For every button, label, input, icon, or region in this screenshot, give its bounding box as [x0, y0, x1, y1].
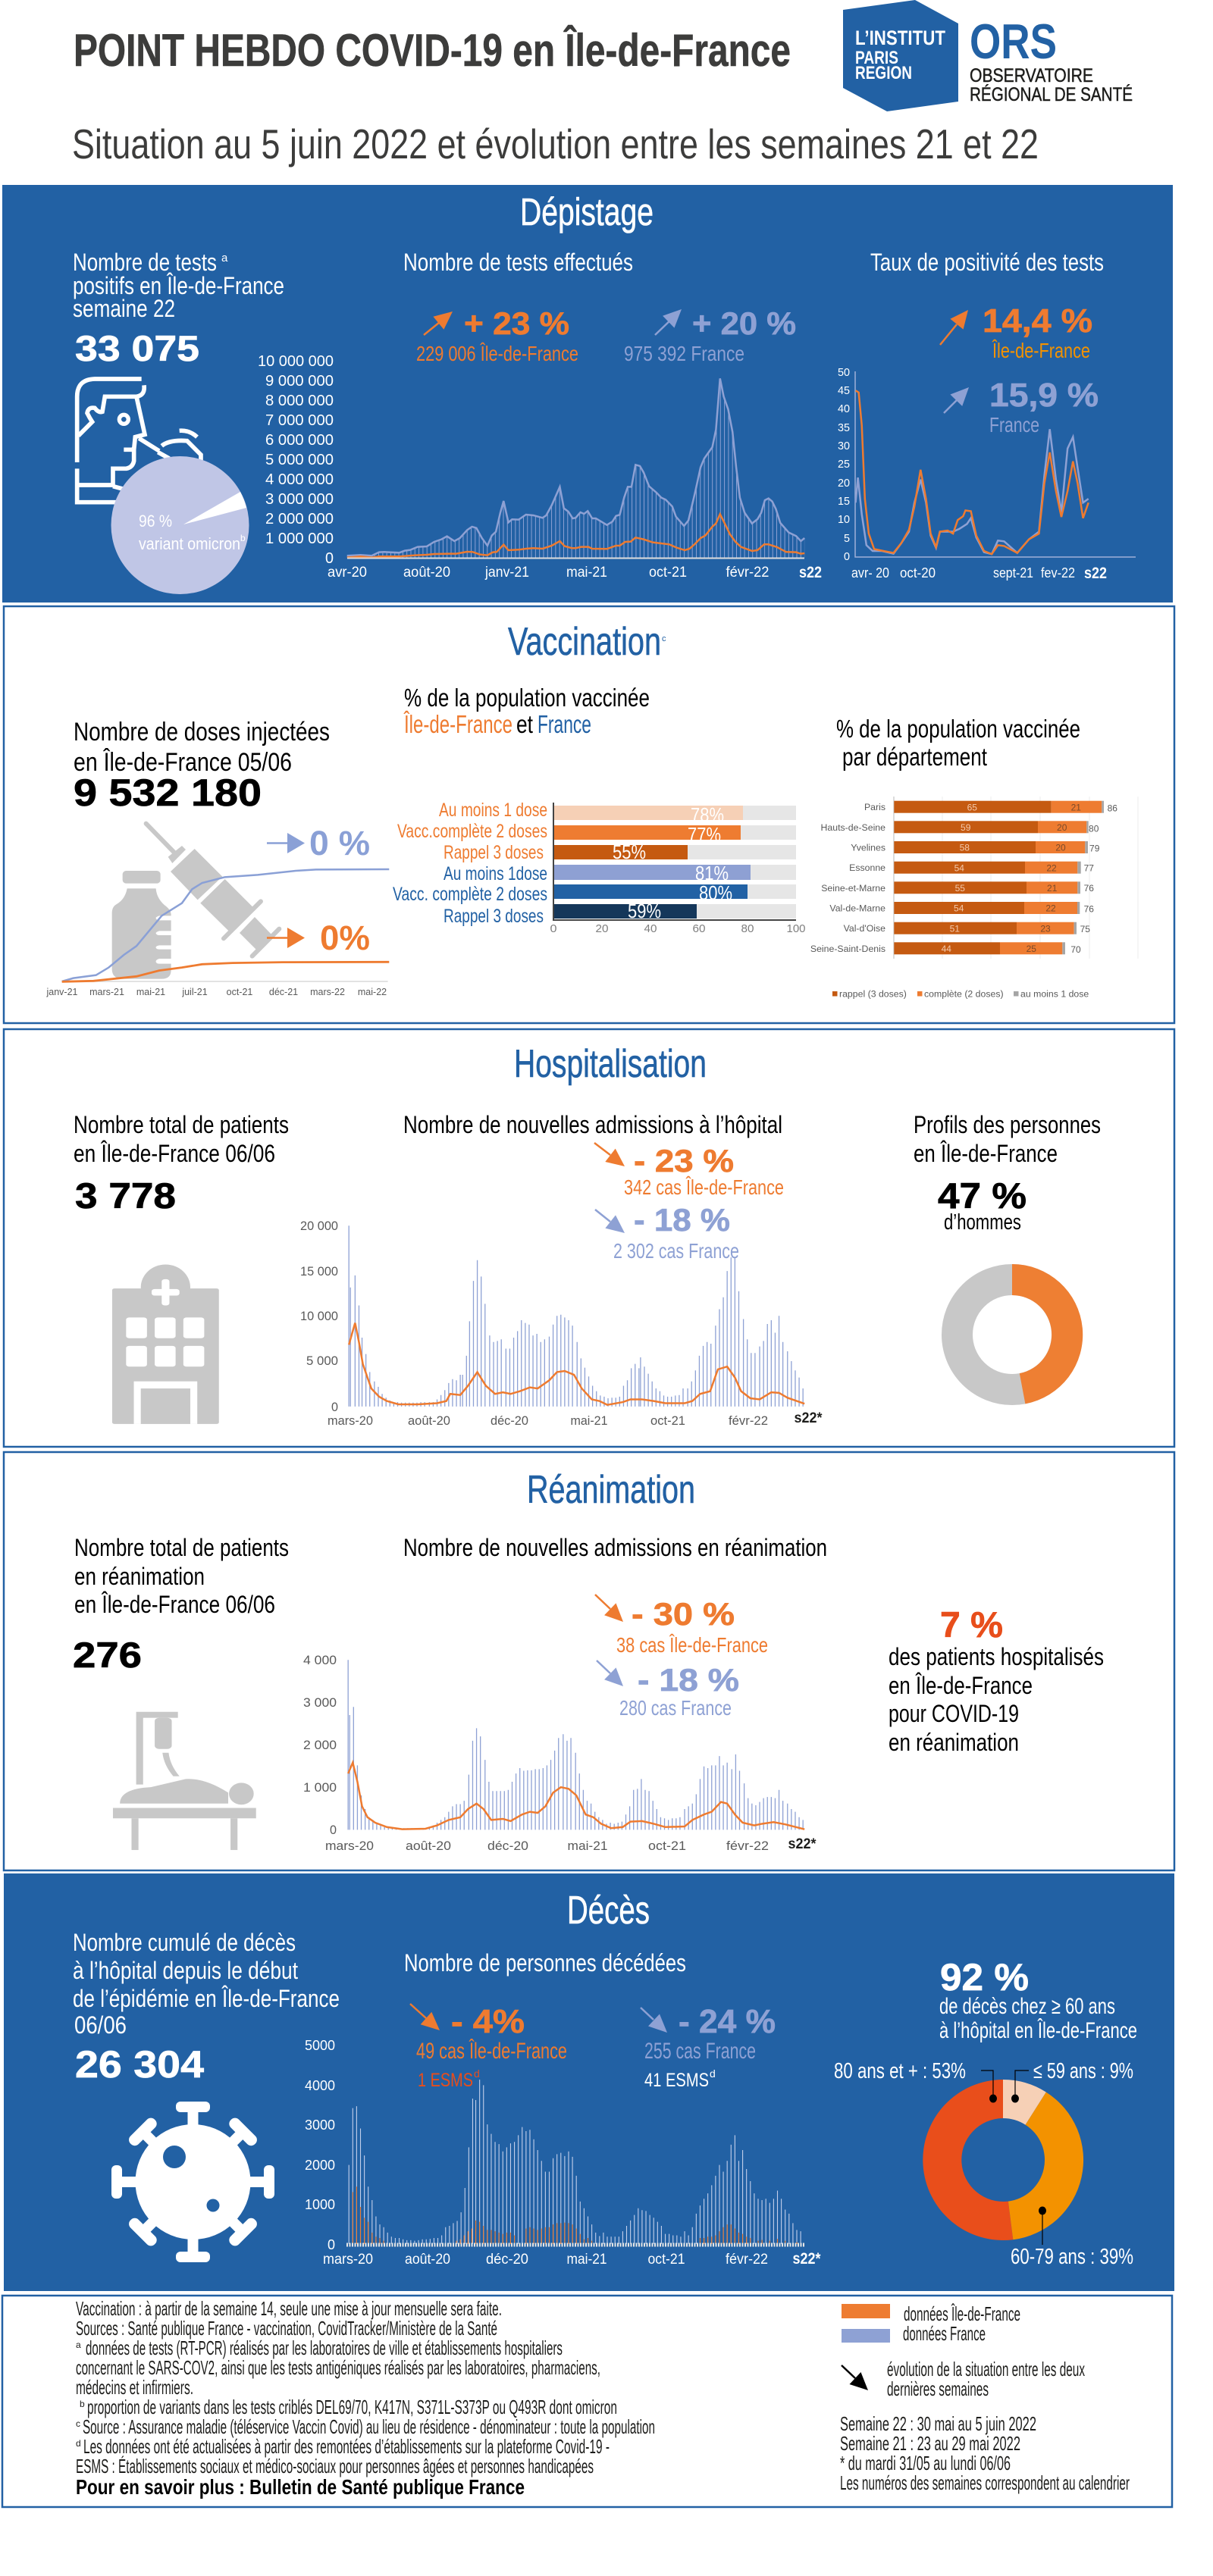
- bar chart: population vaccinée: [393, 800, 805, 935]
- trend: décès France: 41 ESMS: [644, 2070, 709, 2091]
- pie: 96 % variant omicron: b: [240, 533, 246, 543]
- bar chart: vaccination par département: 23: [1040, 923, 1051, 934]
- bar chart: population vaccinée: 40: [644, 922, 657, 935]
- chart: nombre de tests: janv-21: [484, 565, 529, 581]
- bar chart: vaccination par département: 25: [1027, 944, 1036, 954]
- stat: 7 % en réanimation: en réanimation: [889, 1729, 1019, 1756]
- heading: Dépistage: Dépistage: [520, 190, 654, 233]
- chart: admissions réanimation: s22*: [788, 1836, 817, 1852]
- bar chart: vaccination par département: Seine-et-Marne: [821, 883, 885, 894]
- bar chart: population vaccinée: 0: [550, 922, 556, 935]
- trend: admissions France: 2 302 cas France: [613, 1239, 739, 1263]
- bar chart: vaccination par département: 77: [1084, 862, 1094, 873]
- trend: positivité Île-de-France: Île-de-France: [992, 339, 1090, 362]
- text: profils des personnes: Profils des personnes: [914, 1111, 1101, 1138]
- chart: nombre de tests: 8 000 000: [265, 393, 334, 409]
- chart: taux de positivité: 40: [838, 402, 850, 415]
- bar chart: vaccination par département: 21: [1071, 802, 1081, 812]
- chart: nombre de tests: 7 000 000: [265, 412, 334, 429]
- bar chart: vaccination par département: Val-de-Marne: [829, 903, 885, 914]
- heading: nouvelles admissions à l'hôpital: Nombre de nouvelles admissions à l’hôpital: [403, 1111, 782, 1138]
- trend: décès France: - 24 %: [679, 2003, 776, 2040]
- bar chart: population vaccinée: 78%: [691, 803, 724, 826]
- chart: nombre de tests: 2 000 000: [265, 511, 334, 527]
- text: notes de bas de page: ESMS : Établissements sociaux et médico-sociaux pour personnes âgées et personnes handicapées: [76, 2455, 594, 2477]
- bar chart: vaccination par département: 55: [955, 883, 965, 894]
- chart: décès: 4000: [305, 2078, 335, 2093]
- panel: dépistage: [2, 185, 1173, 603]
- trend: tests France: [624, 305, 796, 365]
- chart: admissions hôpital: 20 000: [300, 1219, 338, 1233]
- donut: décès par âge: ≤ 59 ans : 9%: [1033, 2059, 1133, 2083]
- trend: positivité France: France: [989, 413, 1039, 437]
- chart: taux de positivité: avr- 20: [851, 565, 889, 581]
- logo: Institut Paris Region: PARIS: [855, 48, 898, 68]
- bar chart: vaccination par département: 70: [1070, 944, 1081, 955]
- chart: décès: déc-20: [486, 2252, 528, 2268]
- chart: taux de positivité: 25: [838, 458, 850, 471]
- heading: % population vaccinée Île-de-France et France: % de la population vaccinée: [404, 684, 650, 712]
- chart: décès: mai-21: [567, 2252, 606, 2268]
- chart: nombre de tests: 5 000 000: [265, 452, 334, 468]
- stat: 7 % en réanimation: des patients hospitalisés: [889, 1643, 1104, 1670]
- chart: admissions hôpital: 5 000: [306, 1354, 338, 1368]
- stat: 7 % en réanimation: pour COVID-19: [889, 1700, 1019, 1727]
- chart: doses cumulées: janv-21: [45, 987, 78, 997]
- chart: admissions réanimation: oct-21: [648, 1839, 686, 1853]
- chart: nombre de tests: mai-21: [566, 565, 607, 581]
- chart: admissions réanimation: 3 000: [303, 1695, 337, 1710]
- trend: tests Île-de-France: + 23 %: [464, 305, 569, 341]
- bar chart: vaccination par département: 44: [942, 944, 951, 954]
- chart: admissions hôpital: oct-21: [650, 1413, 685, 1428]
- text: nombre total de patients: Nombre total de patients: [74, 1111, 289, 1138]
- chart: taux de positivité: 35: [838, 421, 850, 434]
- heading: Vaccination: c: [662, 634, 666, 643]
- logo: ORS: OBSERVATOIRE: [970, 65, 1093, 86]
- donut: décès par âge: 60-79 ans : 39%: [1011, 2245, 1133, 2269]
- chart: nombre de tests: s22: [799, 564, 822, 581]
- trend: admissions France: [595, 1202, 739, 1263]
- trend: décès Île-de-France: [410, 2003, 567, 2091]
- trend: décès Île-de-France: 49 cas Île-de-France: [416, 2039, 567, 2064]
- chart: nombre de tests: 3 000 000: [265, 491, 334, 508]
- bar chart: vaccination par département: 65: [967, 802, 977, 812]
- bar chart: population vaccinée: Au moins 1 dose: [439, 800, 547, 821]
- trend: décès France: 255 cas France: [644, 2039, 756, 2064]
- chart: admissions réanimation: 4 000: [303, 1653, 337, 1667]
- trend: positivité Île-de-France: [940, 302, 1092, 362]
- stat: 7 % en réanimation: en Île-de-France: [889, 1672, 1033, 1699]
- chart: taux de positivité: 5: [844, 532, 850, 545]
- chart: admissions réanimation: mars-20: [325, 1839, 374, 1853]
- chart: taux de positivité: 20: [838, 477, 850, 490]
- chart: admissions réanimation: [303, 1653, 817, 1853]
- chart: décès: oct-21: [647, 2252, 685, 2268]
- logo: ORS: RÉGIONAL DE SANTÉ: [970, 83, 1133, 105]
- trend: doses Île-de-France: 0%: [320, 919, 370, 957]
- text: notes de bas de page: Sources : Santé publique France - vaccination, CovidTracker/Ministère de la Santé: [76, 2317, 497, 2340]
- trend: réanimation France: [597, 1660, 739, 1720]
- heading: % population par département: par département: [842, 743, 987, 771]
- heading: % population vaccinée Île-de-France et France: France: [538, 710, 591, 738]
- bar chart: population vaccinée: 80: [741, 922, 754, 935]
- heading: Réanimation: Réanimation: [527, 1468, 695, 1512]
- big number: 9 532 180: 9 532 180: [74, 772, 262, 814]
- text: nombre de tests positifs: Nombre de tests: [73, 249, 217, 276]
- logo: Institut Paris Region: [843, 0, 958, 111]
- title: POINT HEBDO COVID-19 en Île-de-France: [74, 25, 791, 76]
- trend: réanimation France: 280 cas France: [619, 1696, 732, 1720]
- bar chart: vaccination par département: 75: [1080, 924, 1090, 934]
- text: notes de bas de page: c: [76, 2418, 80, 2429]
- chart: taux de positivité: fev-22: [1041, 565, 1075, 581]
- logo: Institut Paris Region: L’INSTITUT: [855, 27, 945, 49]
- bar chart: vaccination par département: rappel (3 doses): [839, 988, 907, 999]
- chart: admissions réanimation: 2 000: [303, 1738, 337, 1752]
- stat: 92 % de décès chez 60 ans et plus: à l’hôpital en Île-de-France: [939, 2018, 1137, 2043]
- chart: nombre de tests: avr-20: [328, 565, 367, 581]
- big number: 47 % d'hommes: 47 %: [938, 1175, 1027, 1216]
- bar chart: vaccination par département: Seine-Saint-Denis: [810, 944, 885, 954]
- icon: virus: [111, 2102, 274, 2262]
- bar chart: vaccination par département: 79: [1089, 843, 1100, 853]
- big number: 47 % d'hommes: d’hommes: [944, 1210, 1021, 1235]
- chart: décès: 1000: [305, 2197, 335, 2212]
- chart: taux de positivité: s22: [1084, 565, 1107, 582]
- heading: % population par département: [836, 715, 1080, 771]
- bar chart: vaccination par département: Yvelines: [851, 843, 885, 853]
- pie: 96 % variant omicron: [111, 456, 249, 594]
- trend: admissions France: - 18 %: [634, 1202, 730, 1238]
- chart: décès: [305, 2038, 821, 2268]
- big number: 47 % d'hommes: [938, 1175, 1027, 1235]
- text: notes de bas de page: données de tests (RT-PCR) réalisés par les laboratoires de ville et établissements hospitaliers: [86, 2337, 563, 2359]
- bar chart: vaccination par département: 76: [1084, 883, 1094, 894]
- legend: arrow: évolution de la situation entre les deux: [887, 2358, 1085, 2380]
- trend: tests France: 975 392 France: [624, 342, 744, 365]
- donut: décès par âge: [834, 2059, 1133, 2269]
- chart: admissions hôpital: 10 000: [300, 1309, 338, 1323]
- panel: vaccination: [4, 606, 1174, 1023]
- chart: doses cumulées: mai-21: [136, 987, 165, 997]
- header: [72, 0, 1133, 167]
- chart: admissions réanimation: mai-21: [567, 1839, 608, 1853]
- bar chart: vaccination par département: complète (2 doses): [924, 988, 1004, 999]
- bar chart: population vaccinée: 77%: [688, 823, 721, 846]
- chart: nombre de tests: 10 000 000: [258, 353, 334, 370]
- bar chart: vaccination par département: Hauts-de-Seine: [821, 822, 885, 833]
- trend: réanimation Île-de-France: 38 cas Île-de-France: [616, 1633, 768, 1657]
- bar chart: population vaccinée: 60: [693, 922, 705, 935]
- chart: nombre de tests: févr-22: [726, 565, 769, 581]
- heading: Hospitalisation: Hospitalisation: [514, 1042, 707, 1086]
- bar chart: vaccination par département: 76: [1084, 903, 1094, 914]
- chart: nombre de tests: 0: [325, 550, 334, 567]
- chart: doses cumulées: oct-21: [227, 987, 252, 997]
- text: patients en réanimation: en réanimation: [74, 1563, 205, 1590]
- text: définition des semaines: [840, 2412, 1130, 2494]
- donut: décès par âge: 80 ans et + : 53%: [834, 2059, 966, 2083]
- panel: réanimation: [4, 1452, 1174, 1870]
- chart: admissions réanimation: 0: [330, 1823, 337, 1837]
- text: patients en réanimation: en Île-de-France 06/06: [74, 1591, 275, 1618]
- legend: arrow: [842, 2358, 1085, 2400]
- trend: positivité Île-de-France: 14,4 %: [983, 302, 1092, 340]
- trend: positivité France: [944, 377, 1099, 437]
- bar chart: population vaccinée: 81%: [695, 862, 729, 884]
- chart: taux de positivité: [838, 366, 1136, 582]
- text: notes de bas de page: d: [76, 2438, 81, 2449]
- chart: admissions hôpital: mars-20: [328, 1413, 373, 1428]
- trend: admissions Île-de-France: - 23 %: [634, 1143, 734, 1178]
- logo: Institut Paris Region: REGION: [855, 63, 912, 83]
- text: notes de bas de page: proportion de variants dans les tests criblés DEL69/70, K417N, S371L-S373P ou Q493R dont omicron: [87, 2396, 617, 2418]
- text: nombre cumulé de décès: Nombre cumulé de décès: [73, 1929, 296, 1956]
- link text: pour en savoir plus: Pour en savoir plus : Bulletin de Santé publique France: [76, 2475, 525, 2499]
- bar chart: vaccination par département: [810, 797, 1138, 999]
- legend: couleurs: données Île-de-France: [904, 2302, 1020, 2325]
- chart: doses cumulées: mai-22: [358, 987, 387, 997]
- text: nombre de doses injectées: [74, 718, 330, 777]
- chart: doses cumulées: [45, 869, 389, 997]
- text: notes de bas de page: concernant le SARS-COV2, ainsi que les tests antigéniques réalisés par les laboratoires, pharmaciens,: [76, 2356, 600, 2379]
- text: notes de bas de page: b: [80, 2399, 85, 2409]
- text: nombre cumulé de décès: à l’hôpital depuis le début: [73, 1957, 298, 1984]
- text: patients en réanimation: Nombre total de patients: [74, 1534, 289, 1561]
- bar chart: vaccination par département: 59: [961, 822, 971, 833]
- chart: admissions hôpital: 0: [331, 1400, 338, 1414]
- bar chart: population vaccinée: 100: [787, 922, 805, 935]
- bar chart: vaccination par département: 22: [1046, 862, 1057, 873]
- bar chart: vaccination par département: 54: [954, 903, 964, 914]
- panel: décès: [4, 1873, 1174, 2291]
- chart: nombre de tests: [258, 353, 822, 581]
- heading: % population vaccinée Île-de-France et France: [403, 684, 650, 738]
- trend: réanimation Île-de-France: - 30 %: [632, 1596, 735, 1632]
- chart: décès: 0: [328, 2237, 335, 2252]
- trend: doses France: [267, 824, 370, 862]
- stat: 92 % de décès chez 60 ans et plus: 92 %: [940, 1956, 1029, 1999]
- text: nombre de tests positifs: positifs en Île-de-France: [73, 272, 284, 299]
- chart: doses cumulées: déc-21: [269, 987, 298, 997]
- big number: 3 778: 3 778: [75, 1175, 176, 1216]
- trend: doses Île-de-France: [267, 919, 370, 957]
- chart: taux de positivité: oct-20: [900, 565, 936, 581]
- chart: admissions réanimation: févr-22: [726, 1839, 769, 1853]
- heading: % population vaccinée Île-de-France et France: Île-de-France: [403, 710, 512, 738]
- chart: décès: 2000: [305, 2158, 335, 2173]
- pie: 96 % variant omicron: variant omicron: [139, 534, 240, 553]
- bar chart: vaccination par département: Essonne: [849, 862, 885, 873]
- text: nombre de tests positifs: a: [221, 252, 228, 264]
- chart: admissions hôpital: févr-22: [729, 1413, 768, 1428]
- chart: admissions hôpital: mai-21: [570, 1413, 608, 1428]
- trend: tests Île-de-France: [416, 305, 578, 365]
- bar chart: population vaccinée: Vacc.complète 2 doses: [397, 821, 547, 842]
- heading: Décès: Décès: [567, 1889, 650, 1933]
- chart: décès: mars-20: [323, 2252, 373, 2268]
- bar chart: population vaccinée: 59%: [628, 900, 661, 922]
- chart: admissions réanimation: 1 000: [303, 1780, 337, 1795]
- trend: décès France: d: [710, 2067, 716, 2080]
- bar chart: population vaccinée: Rappel 3 doses: [444, 906, 544, 927]
- heading: nombre de personnes décédées: Nombre de personnes décédées: [404, 1949, 686, 1977]
- chart: admissions hôpital: 15 000: [300, 1264, 338, 1279]
- icon: vaccine vial and syringe: [112, 824, 279, 979]
- icon: hospital: [112, 1264, 219, 1424]
- trend: réanimation Île-de-France: [595, 1595, 768, 1657]
- bar chart: vaccination par département: 20: [1055, 843, 1066, 853]
- big number: 26 304: 26 304: [75, 2043, 204, 2086]
- bar chart: vaccination par département: Paris: [864, 802, 885, 812]
- bar chart: vaccination par département: Val-d'Oise: [844, 923, 885, 934]
- bar chart: population vaccinée: Au moins 1dose: [444, 863, 547, 884]
- text: nombre total de patients: [74, 1111, 289, 1167]
- text: notes de bas de page: Les données ont été actualisées à partir des remontées d’établissements sur la plateforme Covid-19 -: [83, 2435, 610, 2458]
- chart: admissions hôpital: déc-20: [491, 1413, 528, 1428]
- trend: doses France: 0 %: [309, 824, 370, 862]
- heading: % population par département: % de la population vaccinée: [836, 715, 1080, 743]
- logo: ORS: ORS: [970, 14, 1057, 69]
- text: définition des semaines: Semaine 21 : 23 au 29 mai 2022: [840, 2432, 1020, 2455]
- chart: doses cumulées: mars-22: [310, 987, 345, 997]
- big number: 33 075: 33 075: [75, 328, 199, 368]
- text: nombre de tests positifs: [73, 249, 284, 322]
- trend: décès Île-de-France: d: [474, 2067, 480, 2080]
- text: profils des personnes: [914, 1111, 1101, 1167]
- bar chart: population vaccinée: 20: [596, 922, 608, 935]
- bar chart: vaccination par département: 54: [954, 862, 964, 873]
- chart: taux de positivité: 50: [838, 366, 850, 379]
- text: définition des semaines: * du mardi 31/05 au lundi 06/06: [840, 2452, 1011, 2474]
- text: patients en réanimation: [74, 1534, 289, 1618]
- trend: tests France: + 20 %: [692, 305, 796, 341]
- panel: hospitalisation: [4, 1029, 1174, 1447]
- text: notes de bas de page: médecins et infirmiers.: [76, 2376, 193, 2399]
- chart: décès: s22*: [793, 2250, 821, 2268]
- trend: décès Île-de-France: 1 ESMS: [418, 2070, 473, 2091]
- legend: couleurs: [842, 2302, 1020, 2345]
- logo: ORS: [970, 14, 1133, 105]
- chart: nombre de tests: août-20: [403, 565, 450, 581]
- text: définition des semaines: Semaine 22 : 30 mai au 5 juin 2022: [840, 2412, 1036, 2435]
- trend: décès Île-de-France: - 4%: [451, 2003, 525, 2040]
- chart: nombre de tests: 4 000 000: [265, 471, 334, 488]
- panel: notes et légende: [2, 2296, 1172, 2507]
- legend: couleurs: données France: [903, 2322, 986, 2345]
- text: nombre cumulé de décès: [73, 1929, 340, 2039]
- bar chart: vaccination par département: 86: [1108, 803, 1117, 814]
- bar chart: vaccination par département: 80: [1089, 823, 1099, 834]
- bar chart: vaccination par département: 21: [1047, 883, 1058, 894]
- chart: décès: août-20: [405, 2252, 450, 2268]
- bar chart: population vaccinée: 80%: [699, 881, 732, 904]
- chart: admissions hôpital: s22*: [795, 1410, 823, 1426]
- stat: 7 % en réanimation: [889, 1604, 1104, 1756]
- trend: tests Île-de-France: 229 006 Île-de-France: [416, 342, 578, 365]
- trend: admissions Île-de-France: [594, 1143, 784, 1199]
- bar chart: vaccination par département: 51: [950, 923, 960, 934]
- stat: 92 % de décès chez 60 ans et plus: [939, 1956, 1137, 2043]
- text: notes de bas de page: Vaccination : à partir de la semaine 14, seule une mise à jour mensuelle sera faite.: [76, 2297, 502, 2320]
- trend: décès France: [641, 2003, 776, 2091]
- text: notes de bas de page: Source : Assurance maladie (téléservice Vaccin Covid) au lieu de résidence - dénominateur : toute la population: [83, 2415, 655, 2438]
- heading: taux de positivité: Taux de positivité des tests: [870, 249, 1104, 276]
- trend: admissions Île-de-France: 342 cas Île-de-France: [624, 1175, 784, 1199]
- chart: admissions hôpital: [300, 1219, 823, 1428]
- text: notes de bas de page: [76, 2297, 655, 2477]
- chart: taux de positivité: 30: [838, 440, 850, 452]
- icon: person being swabbed: [77, 379, 201, 502]
- big number: 276: 276: [73, 1635, 142, 1675]
- chart: admissions réanimation: août-20: [406, 1839, 451, 1853]
- heading: nombre de tests effectués: Nombre de tests effectués: [403, 249, 633, 276]
- chart: nombre de tests: 9 000 000: [265, 373, 334, 390]
- stat: 7 % en réanimation: 7 %: [940, 1604, 1003, 1645]
- chart: décès: 3000: [305, 2117, 335, 2133]
- heading: nouvelles admissions en réanimation: Nombre de nouvelles admissions en réanimation: [403, 1534, 827, 1561]
- chart: admissions réanimation: déc-20: [487, 1839, 528, 1853]
- text: notes de bas de page: a: [76, 2340, 81, 2350]
- trend: positivité France: 15,9 %: [989, 377, 1099, 414]
- text: nombre cumulé de décès: de l’épidémie en Île-de-France: [73, 1985, 340, 2012]
- chart: admissions hôpital: août-20: [408, 1413, 450, 1428]
- pie: 96 % variant omicron: 96 %: [139, 512, 172, 531]
- bar chart: vaccination par département: 20: [1057, 822, 1067, 833]
- icon: patient in bed with IV: [113, 1712, 256, 1850]
- bar chart: vaccination par département: au moins 1 dose: [1020, 988, 1089, 999]
- chart: doses cumulées: mars-21: [89, 987, 124, 997]
- trend: réanimation France: - 18 %: [638, 1662, 739, 1698]
- chart: taux de positivité: 15: [838, 495, 850, 508]
- bar chart: population vaccinée: Vacc. complète 2 doses: [393, 884, 547, 905]
- chart: nombre de tests: 6 000 000: [265, 432, 334, 449]
- legend: arrow: dernières semaines: [887, 2377, 989, 2400]
- chart: nombre de tests: oct-21: [649, 565, 687, 581]
- chart: décès: 5000: [305, 2038, 335, 2053]
- chart: décès: févr-22: [726, 2252, 768, 2268]
- bar chart: vaccination par département: 22: [1045, 903, 1056, 914]
- text: nombre de doses injectées: Nombre de doses injectées: [74, 718, 330, 747]
- chart: taux de positivité: sept-21: [993, 565, 1033, 581]
- bar chart: population vaccinée: 55%: [613, 840, 646, 863]
- bar chart: vaccination par département: 58: [960, 843, 970, 853]
- text: nombre de doses injectées: en Île-de-France 05/06: [74, 748, 292, 777]
- chart: taux de positivité: 0: [844, 550, 850, 563]
- text: nombre cumulé de décès: 06/06: [74, 2011, 127, 2039]
- heading: Vaccination: Vaccination: [508, 620, 661, 664]
- chart: taux de positivité: 45: [838, 384, 850, 397]
- chart: taux de positivité: 10: [838, 513, 850, 526]
- stat: 92 % de décès chez 60 ans et plus: de décès chez ≥ 60 ans: [939, 1994, 1115, 2019]
- chart: nombre de tests: 1 000 000: [265, 531, 334, 547]
- heading: % population vaccinée Île-de-France et France: et: [516, 710, 533, 738]
- donut: part d'hommes: [957, 1264, 1083, 1404]
- text: nombre total de patients: en Île-de-France 06/06: [74, 1140, 275, 1167]
- bar chart: population vaccinée: Rappel 3 doses: [444, 842, 544, 863]
- text: nombre de tests positifs: semaine 22: [73, 295, 175, 322]
- text: profils des personnes: en Île-de-France: [914, 1140, 1058, 1167]
- chart: doses cumulées: juil-21: [181, 987, 208, 997]
